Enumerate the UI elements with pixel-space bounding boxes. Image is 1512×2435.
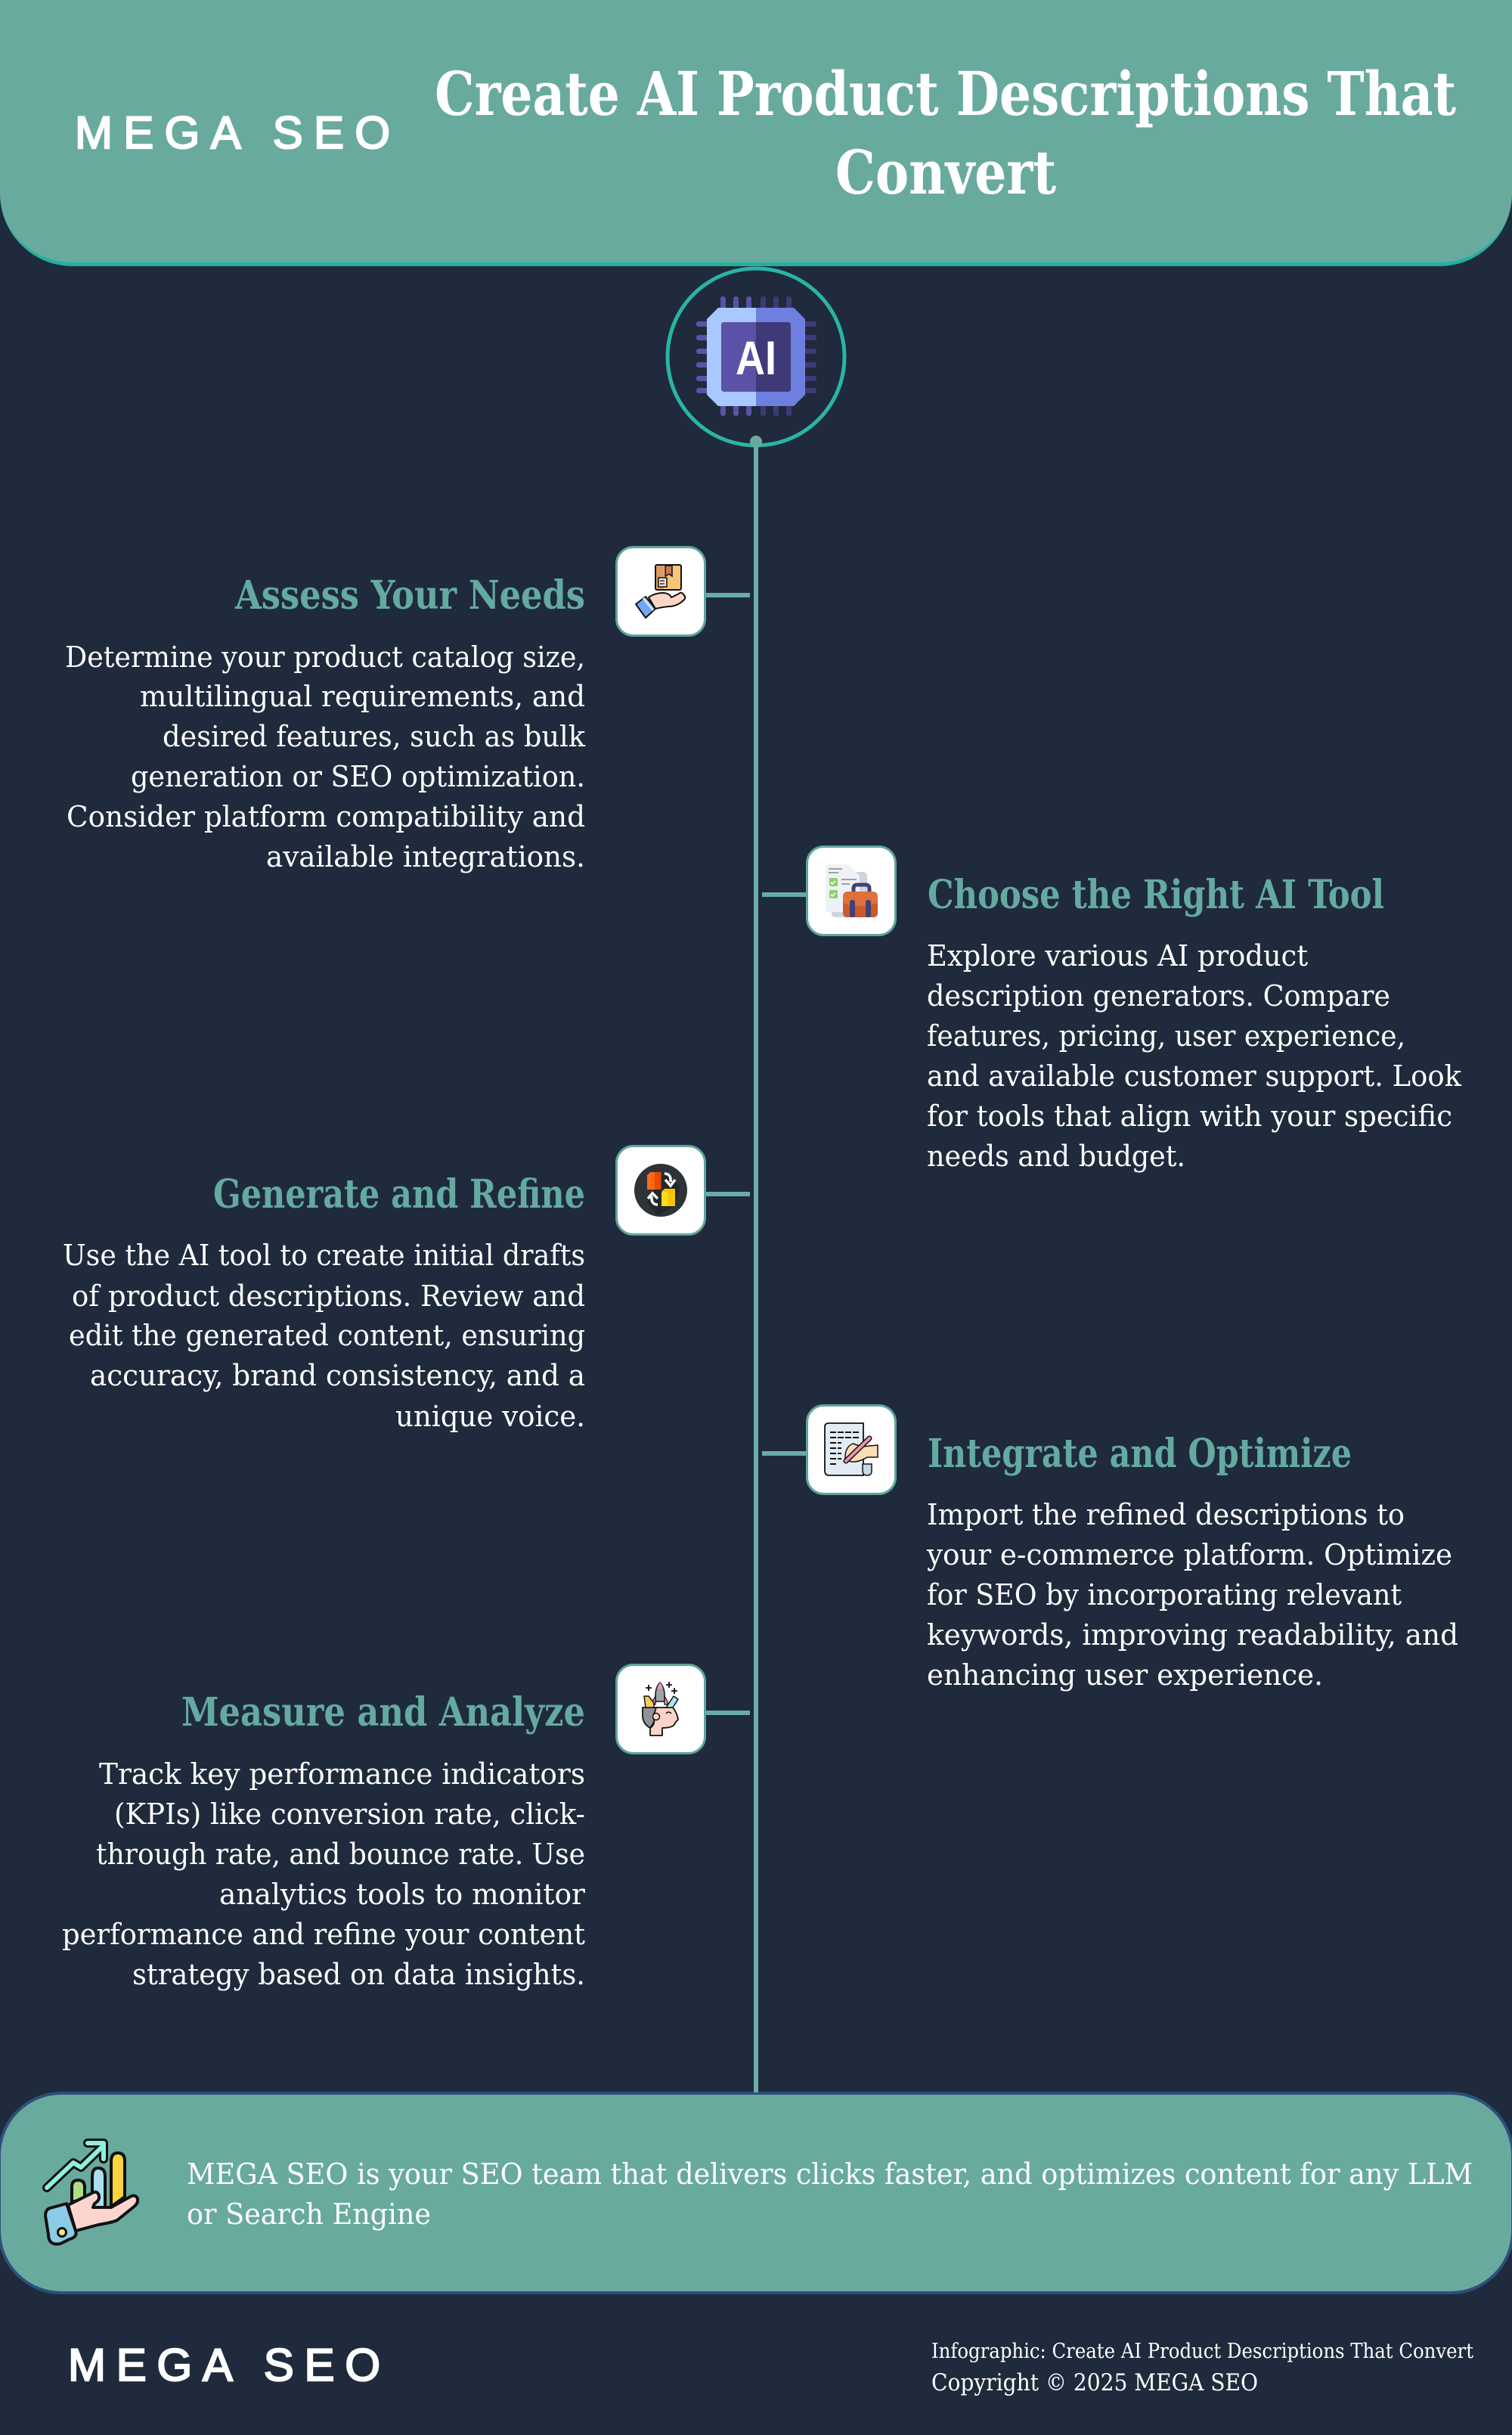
body: Generate and Refine: Use the AI tool to create initial drafts — [63, 1239, 585, 1272]
body: Assess Your Needs: Consider platform compatibility and — [67, 800, 585, 833]
heading: Assess Your Needs: Assess Your Needs — [234, 572, 585, 619]
banner text: or Search Engine — [187, 2198, 431, 2231]
banner text: MEGA SEO is your SEO team that delivers clicks faster, and optimizes content for any LLM — [187, 2157, 1473, 2191]
body: Assess Your Needs — [65, 641, 585, 873]
body: Assess Your Needs: desired features, such as bulk — [163, 720, 585, 753]
body: Assess Your Needs: Determine your product catalog size, — [65, 641, 585, 674]
body: Measure and Analyze: Track key performance indicators — [99, 1757, 585, 1791]
body: Assess Your Needs: generation or SEO optimization. — [131, 760, 585, 793]
icon box: checklist and briefcase — [807, 847, 895, 935]
body: Integrate and Optimize: your e-commerce platform. Optimize — [926, 1538, 1452, 1571]
body: Integrate and Optimize: keywords, improving readability, and — [927, 1618, 1458, 1652]
heading: Measure and Analyze: Measure and Analyze — [181, 1689, 585, 1736]
body: Integrate and Optimize: for SEO by incorporating relevant — [927, 1578, 1402, 1611]
connector: step 3 — [706, 1192, 750, 1196]
body: Generate and Refine: unique voice. — [395, 1400, 585, 1433]
step 4 text — [926, 1431, 1458, 1692]
body: Measure and Analyze: strategy based on data insights. — [132, 1958, 585, 1991]
step 3 text — [63, 1171, 585, 1433]
title: Convert — [835, 137, 1056, 208]
body: Generate and Refine: edit the generated content, ensuring — [69, 1319, 585, 1352]
step 5 text — [62, 1689, 586, 1991]
heading: Integrate and Optimize: Integrate and Optimize — [928, 1431, 1352, 1477]
body: Choose the Right AI Tool: needs and budget. — [927, 1140, 1185, 1173]
body: Choose the Right AI Tool: Explore various AI product — [927, 939, 1308, 972]
body: Choose the Right AI Tool: for tools that align with your specific — [927, 1100, 1452, 1133]
icon: AI chip in circle: AI — [736, 332, 776, 385]
footer credits: Infographic: Create AI Product Descriptions That Convert — [931, 2340, 1473, 2363]
body: Integrate and Optimize — [926, 1498, 1458, 1692]
icon: AI chip in circle — [668, 268, 844, 445]
heading: Generate and Refine: Generate and Refine — [213, 1171, 585, 1218]
heading: Choose the Right AI Tool: Choose the Right AI Tool — [928, 872, 1384, 918]
footer banner panel — [0, 2092, 1512, 2294]
body: Measure and Analyze: analytics tools to monitor — [219, 1878, 586, 1911]
body: Measure and Analyze: (KPIs) like conversion rate, click- — [114, 1798, 585, 1831]
icon box: hand holding package — [617, 547, 705, 635]
footer credits: Copyright © 2025 MEGA SEO — [931, 2369, 1258, 2396]
connector: step 2 — [762, 892, 806, 897]
step 1 text — [65, 572, 585, 873]
icon: hand holding growth chart — [45, 2143, 138, 2244]
connector: step 1 — [706, 593, 750, 597]
step 2 text — [927, 872, 1461, 1173]
body: Assess Your Needs: multilingual requirements, and — [140, 680, 585, 713]
body: Choose the Right AI Tool: features, pricing, user experience, — [927, 1019, 1405, 1053]
title — [435, 58, 1456, 208]
body: Integrate and Optimize: Import the refined descriptions to — [927, 1498, 1405, 1531]
header logo: MEGA SEO: MEGA SEO — [75, 107, 390, 158]
footer logo: MEGA SEO: MEGA SEO — [68, 2340, 380, 2390]
body: Assess Your Needs: available integrations. — [266, 840, 585, 873]
body: Choose the Right AI Tool — [927, 939, 1461, 1173]
connector: step 4 — [762, 1451, 806, 1456]
icon box: head with rocket, pencil and ruler — [617, 1665, 705, 1753]
icon box: hand writing on document — [807, 1405, 895, 1494]
body: Generate and Refine: of product descriptions. Review and — [72, 1280, 585, 1313]
footer credits — [931, 2340, 1473, 2396]
connector: step 5 — [706, 1711, 750, 1715]
body: Generate and Refine: accuracy, brand consistency, and a — [90, 1359, 585, 1392]
body: Choose the Right AI Tool: description generators. Compare — [927, 979, 1390, 1013]
body: Choose the Right AI Tool: and available customer support. Look — [927, 1059, 1461, 1093]
icon box: refine documents cycle — [617, 1146, 705, 1234]
header band — [0, 0, 1512, 266]
body: Generate and Refine — [63, 1239, 585, 1433]
body: Integrate and Optimize: enhancing user experience. — [927, 1658, 1323, 1692]
body: Measure and Analyze: through rate, and bounce rate. Use — [96, 1838, 585, 1871]
body: Measure and Analyze — [62, 1757, 586, 1991]
timeline start dot — [750, 436, 762, 448]
timeline vertical line — [754, 442, 758, 2092]
banner text — [187, 2157, 1473, 2231]
body: Measure and Analyze: performance and refine your content — [62, 1918, 585, 1951]
